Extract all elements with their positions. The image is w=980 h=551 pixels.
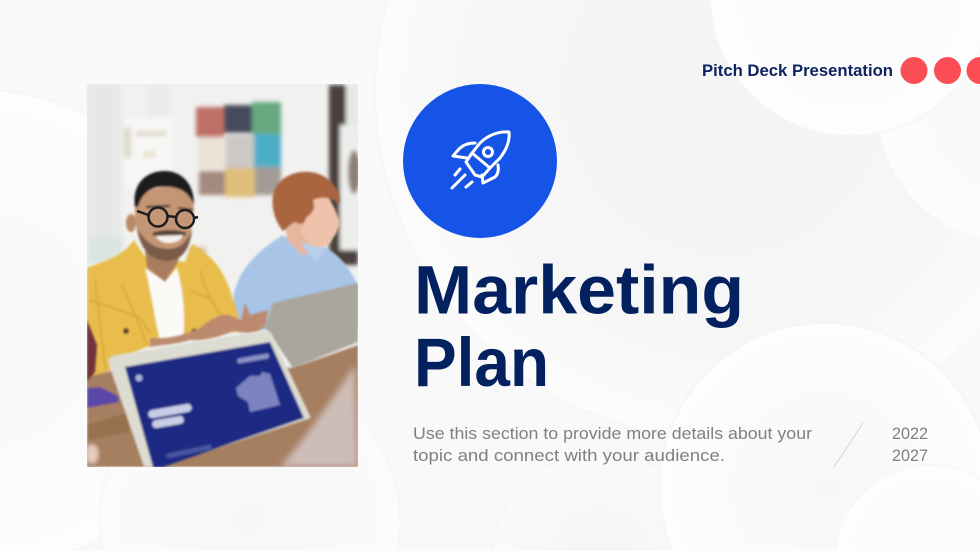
photo: team meeting with laptops <box>85 84 360 467</box>
photo man in yellow jacket <box>87 171 268 390</box>
description text <box>413 424 812 465</box>
photo man in blue shirt <box>232 172 358 330</box>
slide content <box>87 57 980 468</box>
years: 2027 <box>892 446 928 465</box>
diagonal divider <box>834 423 863 467</box>
photo laptop, table and tablet <box>87 283 358 467</box>
photo wall and posters <box>87 84 360 265</box>
decorative red dots <box>900 57 980 84</box>
photo tablet <box>108 331 311 467</box>
icon: rocket <box>452 132 509 188</box>
years <box>892 424 928 465</box>
icon: blue circle with rocket <box>403 84 557 238</box>
years: 2022 <box>892 424 928 443</box>
photo glasses <box>137 208 198 228</box>
title: Plan <box>414 324 549 401</box>
description text: Use this section to provide more details about your <box>413 424 812 443</box>
description text: topic and connect with your audience. <box>413 446 725 465</box>
header label: Pitch Deck Presentation <box>702 62 893 80</box>
title: Marketing <box>414 252 744 328</box>
title <box>414 252 744 401</box>
